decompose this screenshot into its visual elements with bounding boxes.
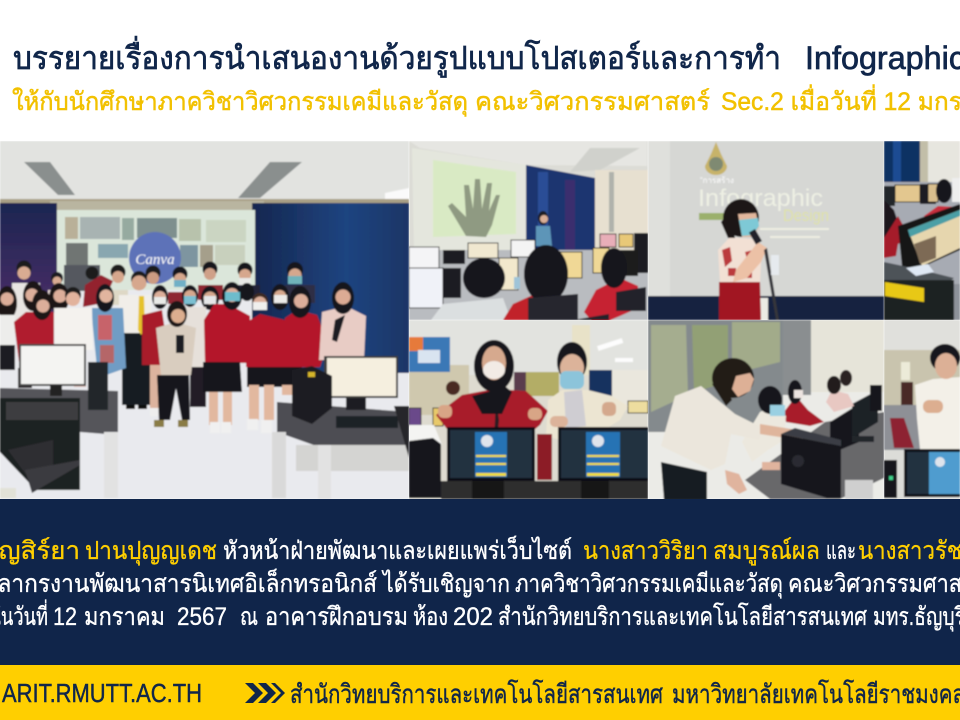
line 3: สำนักวิทยบริการและเทคโนโลยีสารสนเทศ (498, 602, 867, 631)
icon: triple chevron arrows (245, 683, 285, 703)
yellow footer bar (0, 665, 960, 720)
line 2: ได้รับเชิญจาก (381, 569, 510, 598)
woman in white coat (54, 287, 93, 387)
title: Infographic (805, 40, 960, 76)
right desk, monitor and PC (272, 356, 409, 499)
slide text: Design (783, 206, 829, 225)
subtitle: คณะวิศวกรรมศาสตร์ (475, 88, 710, 116)
student with white mask and red jacket (436, 339, 548, 430)
line 1 (0, 535, 960, 566)
line 3: 202 (453, 603, 493, 631)
photo: lecturer helping students at computers (648, 320, 884, 500)
standing lecturer (660, 357, 792, 499)
presenter (536, 211, 552, 246)
woman in red jacket, left (14, 290, 54, 388)
line 1: หัวหน้าฝ่ายพัฒนาและเผยแพร่เว็บไซต์ (223, 535, 572, 565)
angled monitor (898, 204, 960, 270)
line 3: ห้อง (413, 603, 448, 631)
slide text (698, 176, 829, 238)
back row of students (10, 260, 316, 320)
description text (0, 535, 960, 632)
line 1: และ (826, 537, 856, 565)
audience (431, 258, 511, 320)
woman in beige top, front (154, 301, 196, 427)
subtitle: ให้กับนักศึกษาภาควิชาวิศวกรรมเคมีและวัสดุ (12, 87, 468, 117)
slide text: “การสร้าง (700, 176, 734, 185)
hand on slide (448, 179, 500, 237)
students in red jackets, right (203, 282, 328, 433)
monitors on desk (830, 385, 882, 454)
chair (0, 398, 80, 498)
line 3 (0, 599, 960, 632)
wall TV (409, 337, 450, 372)
monitor with poster (904, 449, 960, 497)
middle row of students (0, 281, 289, 407)
line 1: สมบูรณ์ผล (713, 537, 820, 566)
PC tower (781, 428, 841, 498)
left desk and monitor (0, 344, 118, 498)
line 3: มกราคม (84, 603, 165, 631)
monitor with poster (447, 427, 535, 481)
student in red jacket, centre (142, 285, 170, 416)
line 2 (0, 568, 960, 599)
photo: students at computers, side view (884, 141, 960, 320)
line 3: อาคารฝึกอบรม (265, 603, 408, 631)
line 2: ภาควิชาวิศวกรรมเคมีและวัสดุ (515, 570, 783, 599)
photo: two students pointing to posters (409, 320, 648, 499)
line 3: 12 (53, 603, 77, 631)
navy information band (0, 499, 960, 665)
desk (745, 412, 884, 499)
line 1: นางสาววิริยา (583, 537, 708, 565)
subtitle: Sec.2 เมื่อวันที่ 12 มกร (721, 84, 960, 116)
footer website address: ARIT.RMUTT.AC.TH (2, 678, 202, 708)
slide text: Infographic (698, 185, 823, 212)
student with blue mask (546, 341, 626, 439)
woman in pink shirt (319, 282, 366, 360)
line 3: ณ (240, 603, 258, 631)
Canva circle on projector: Canva (135, 252, 175, 268)
man with yellow tie (119, 271, 151, 409)
photo: lecturer at Infographic Design slide (648, 141, 884, 320)
seated students (742, 370, 854, 470)
photo: lecturer with hand slide (409, 141, 648, 326)
photo: group photo with Canva screen (0, 141, 409, 499)
footer organisation name: สำนักวิทยบริการและเทคโนโลยีสารสนเทศ (290, 679, 663, 709)
Canva circle on projector (129, 232, 181, 284)
subtitle (12, 84, 960, 117)
line 3: 2567 (177, 603, 227, 631)
woman in floral dress (91, 284, 126, 378)
university emblem (705, 142, 727, 175)
PC tower with yellow sticker (884, 262, 954, 282)
monitor with poster, right (558, 427, 648, 481)
speaker (718, 199, 779, 320)
title: บรรยายเรื่องการนำเสนองานด้วยรูปแบบโปสเตอร์และการทำ (13, 36, 781, 78)
line 1: ปานปุญญเดช (85, 537, 217, 566)
student (915, 344, 960, 449)
photo: student with thumbs up (884, 320, 960, 499)
